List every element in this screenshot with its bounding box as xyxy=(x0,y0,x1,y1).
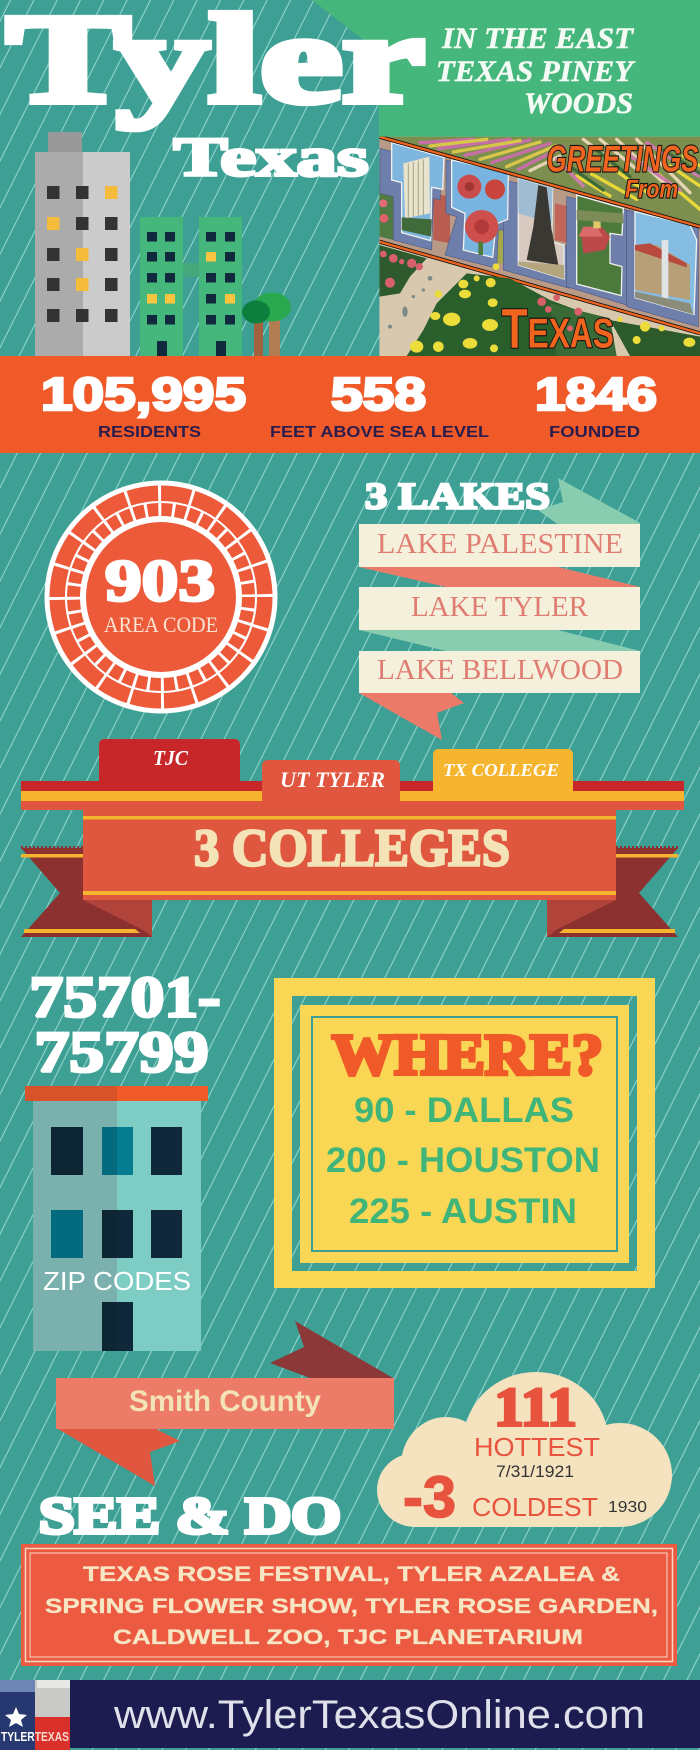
icon: zip codes building xyxy=(25,1086,208,1351)
letter L xyxy=(518,178,564,279)
cloud: temperatures: 1930 xyxy=(608,1499,647,1516)
footer bar xyxy=(70,1680,700,1748)
lakes ribbon xyxy=(359,477,640,740)
stats bar xyxy=(0,356,700,453)
orange ribbon lines xyxy=(379,137,700,333)
distance list: 200 - HOUSTON xyxy=(326,1141,600,1180)
stat: elevation xyxy=(270,368,489,441)
lake: Palestine xyxy=(359,524,640,567)
main banner: 3 COLLEGES xyxy=(194,820,510,878)
stat: elevation: 558 xyxy=(331,368,426,420)
cloud: temperatures xyxy=(377,1372,672,1530)
panel: attractions: CALDWELL ZOO, TJC PLANETARIUM xyxy=(113,1626,583,1649)
stat: residents: RESIDENTS xyxy=(98,424,201,441)
panel: attractions xyxy=(21,1544,677,1666)
distance list: 225 - AUSTIN xyxy=(349,1192,577,1231)
distance list: 90 - DALLAS xyxy=(354,1091,574,1130)
stat: founded: FOUNDED xyxy=(549,424,640,441)
stat: founded xyxy=(535,368,657,441)
postcard lettering xyxy=(502,138,698,360)
stat: founded: 1846 xyxy=(535,368,657,420)
logo: Tyler Texas flag: TYLERTEXAS xyxy=(1,1729,69,1744)
header green panel xyxy=(312,0,700,137)
tab: TJC xyxy=(99,739,240,782)
tab: TJC: TJC xyxy=(153,746,189,770)
zip code range: 75799 xyxy=(34,1020,208,1084)
lake: Tyler: LAKE TYLER xyxy=(411,592,588,623)
lake: Palestine: LAKE PALESTINE xyxy=(377,529,623,560)
panel: where distances xyxy=(274,978,655,1288)
heading: see and do: SEE & DO xyxy=(39,1488,341,1545)
stat: residents: 105,995 xyxy=(41,368,246,420)
ribbon: Smith County: Smith County xyxy=(129,1385,321,1418)
panel: attractions: SPRING FLOWER SHOW, TYLER ROSE GARDEN, xyxy=(45,1595,658,1618)
tagline: WOODS xyxy=(524,87,633,120)
postcard lettering: TEXAS xyxy=(502,297,614,360)
tagline xyxy=(436,22,636,120)
lettering band xyxy=(379,137,700,333)
icon: gray skyscraper xyxy=(35,132,130,356)
zip code range xyxy=(30,964,221,1084)
icon: green buildings xyxy=(140,217,242,356)
letter R xyxy=(635,212,697,314)
lake: Bellwood xyxy=(359,651,640,693)
icon: trees xyxy=(242,292,291,356)
tagline: TEXAS PINEY xyxy=(436,55,636,88)
main banner xyxy=(83,810,616,900)
tab: UT Tyler: UT TYLER xyxy=(280,767,385,792)
lake: Bellwood: LAKE BELLWOOD xyxy=(377,655,623,686)
panel: attractions: TEXAS ROSE FESTIVAL, TYLER AZALEA & xyxy=(83,1563,620,1586)
letter T xyxy=(392,143,444,241)
field of flowers xyxy=(379,137,700,227)
stat: residents xyxy=(41,368,246,441)
area code badge xyxy=(44,480,278,714)
flower bushes xyxy=(379,245,700,356)
postcard: Greetings from Tyler Texas xyxy=(379,137,700,360)
heading: 3 lakes: 3 LAKES xyxy=(365,477,550,518)
cloud: temperatures: 111 xyxy=(494,1376,577,1438)
ribbon tail: right xyxy=(547,848,678,937)
ribbon: Smith County xyxy=(56,1321,394,1486)
zip code range: 75701- xyxy=(30,964,221,1030)
footer bar: www.TylerTexasOnline.com xyxy=(113,1693,645,1737)
letter E xyxy=(577,195,623,296)
tab: TX College: TX COLLEGE xyxy=(443,760,559,780)
postcard lettering: From xyxy=(625,176,678,204)
letter Y xyxy=(452,160,508,257)
letter shadows xyxy=(380,148,698,327)
tagline: IN THE EAST xyxy=(441,22,635,55)
colleges banner xyxy=(21,739,684,937)
cloud: temperatures: HOTTEST xyxy=(474,1432,600,1462)
tab: UT Tyler xyxy=(262,760,400,801)
logo: Tyler Texas flag xyxy=(0,1680,70,1750)
distance list xyxy=(326,1091,600,1231)
cloud: temperatures: 7/31/1921 xyxy=(496,1462,574,1481)
cloud: temperatures: -3 xyxy=(403,1465,456,1530)
cloud: temperatures: COLDEST xyxy=(472,1492,598,1522)
area code badge: 903 xyxy=(105,548,215,614)
tab: TX College xyxy=(433,749,573,795)
icon: zip codes building: ZIP CODES xyxy=(43,1266,191,1296)
subtitle: Texas: Texas xyxy=(174,126,368,188)
heading: where: WHERE? xyxy=(332,1022,603,1087)
ribbon tail: left xyxy=(21,848,152,937)
lake: Tyler xyxy=(359,587,640,630)
stat: elevation: FEET ABOVE SEA LEVEL xyxy=(270,424,489,441)
area code badge: AREA CODE xyxy=(104,612,218,637)
